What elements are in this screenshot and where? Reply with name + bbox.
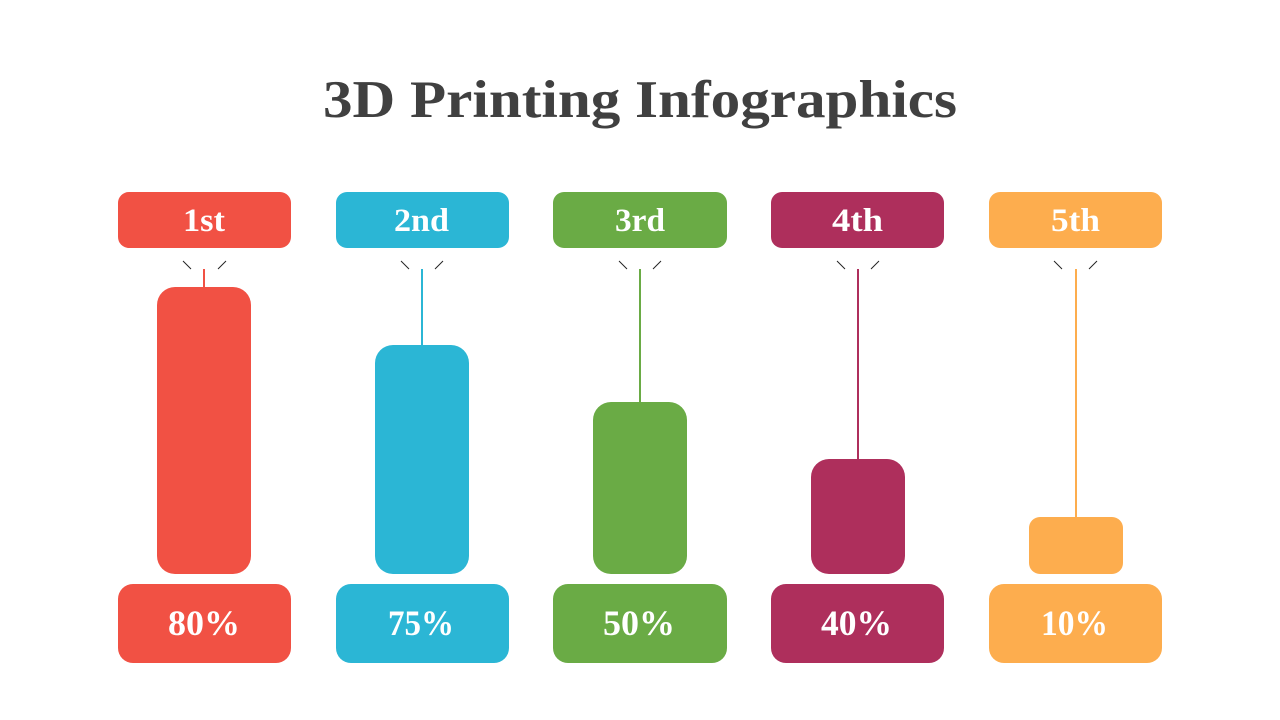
value label: 80%: 80% [168, 603, 240, 643]
bar [157, 287, 251, 574]
rank label: 3rd: 3rd [615, 203, 665, 239]
column: 5th 10% [989, 192, 1162, 663]
tick marks [837, 261, 879, 269]
tick marks [183, 261, 226, 269]
value label: 50% [553, 584, 727, 663]
tick marks [1054, 261, 1097, 269]
tick marks [619, 261, 661, 269]
rank label: 3rd [553, 192, 727, 248]
connector line [1075, 269, 1077, 518]
rank label: 1st [118, 192, 291, 248]
bar [1029, 517, 1123, 574]
value label: 80% [118, 584, 291, 663]
value label: 10%: 10% [1041, 603, 1108, 643]
column: 4th 40% [771, 192, 944, 663]
rank label: 5th: 5th [1051, 203, 1100, 239]
rank label: 4th [771, 192, 944, 248]
column: 3rd 50% [553, 192, 727, 663]
rank label: 1st: 1st [183, 203, 225, 239]
rank label: 4th: 4th [832, 203, 883, 239]
bar [811, 459, 905, 574]
connector line [639, 269, 641, 403]
value label: 10% [989, 584, 1162, 663]
bar [593, 402, 687, 574]
rank label: 2nd: 2nd [394, 203, 449, 239]
column: 2nd 75% [336, 192, 509, 663]
tick marks [401, 261, 443, 269]
value label: 40% [771, 584, 944, 663]
value label: 40%: 40% [821, 603, 892, 643]
title: 3D Printing Infographics [323, 71, 957, 129]
value label: 50%: 50% [603, 603, 675, 643]
rank label: 5th [989, 192, 1162, 248]
connector line [421, 269, 423, 346]
value label: 75% [336, 584, 509, 663]
connector line [203, 269, 205, 288]
connector line [857, 269, 859, 460]
bar [375, 345, 469, 574]
value label: 75%: 75% [388, 603, 454, 643]
column: 1st 80% [118, 192, 291, 663]
rank label: 2nd [336, 192, 509, 248]
